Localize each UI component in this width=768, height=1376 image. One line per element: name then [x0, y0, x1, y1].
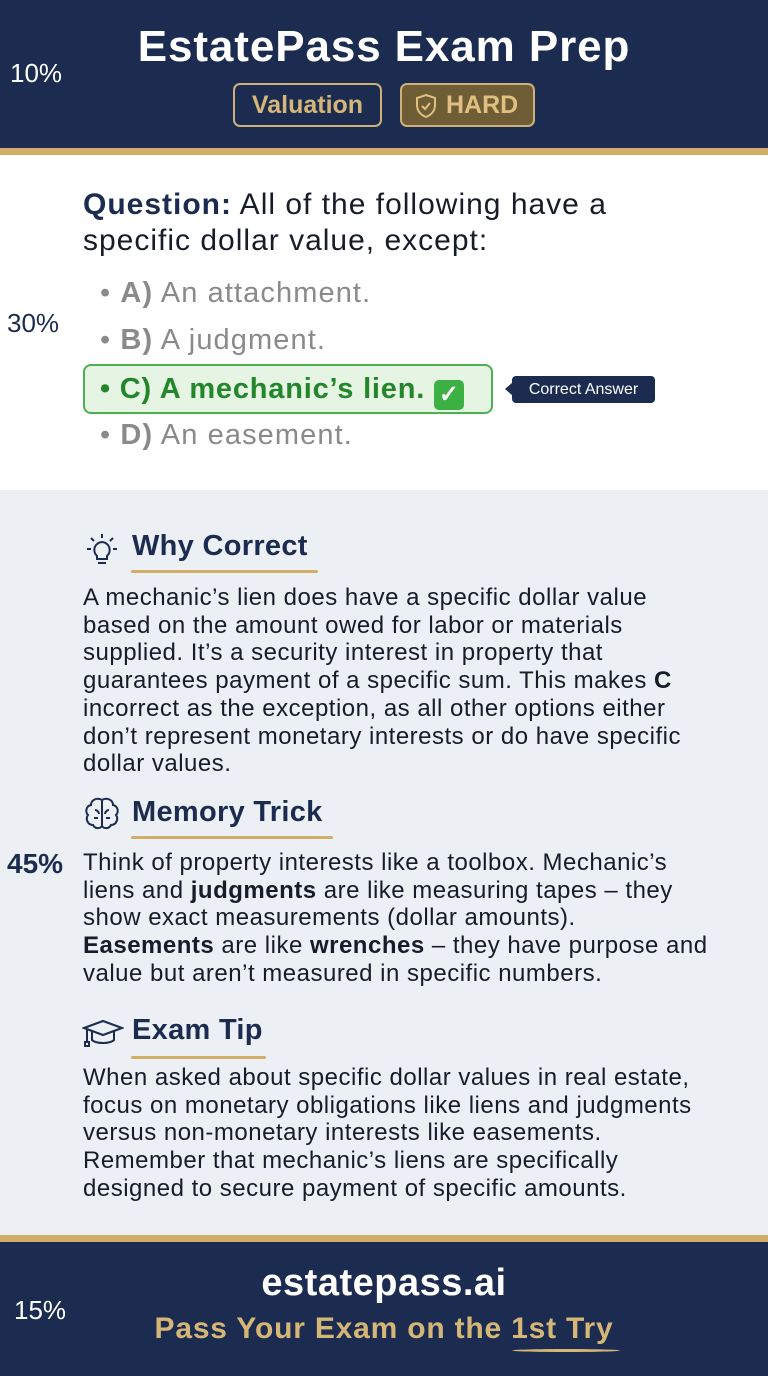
callout: Correct Answer: Correct Answer — [529, 381, 638, 398]
title: EstatePass Exam Prep — [138, 22, 630, 71]
callout: Correct Answer — [512, 376, 655, 403]
text block: versus non-monetary interests like easements. — [83, 1119, 602, 1146]
header — [0, 0, 768, 148]
text block: focus on monetary obligations like liens and judgments — [83, 1092, 692, 1119]
label: 30%: 30% — [7, 308, 59, 338]
badge: HARD — [400, 83, 535, 127]
text block: When asked about specific dollar values in real estate, — [83, 1064, 690, 1091]
text block — [83, 1064, 692, 1202]
text block: designed to secure payment of specific amounts. — [83, 1175, 627, 1202]
option C correct — [83, 364, 493, 414]
text block: dollar values. — [83, 750, 231, 777]
badge: HARD: HARD — [446, 91, 518, 119]
tagline: Pass Your Exam on the 1st Try — [155, 1312, 613, 1345]
icon: shield — [416, 94, 436, 118]
section: exam tip — [82, 1014, 692, 1202]
text block: don’t represent monetary interests or do have specific — [83, 723, 681, 750]
badge: Valuation: Valuation — [252, 91, 363, 119]
text block: supplied. It’s a security interest in property that — [83, 639, 603, 666]
option C correct: • C) A mechanic’s lien. — [100, 373, 425, 405]
text block: guarantees payment of a specific sum. This makes C — [83, 667, 672, 694]
label: 45%: 45% — [7, 848, 63, 879]
footer url: estatepass.ai — [261, 1262, 507, 1304]
text block — [83, 849, 708, 987]
text block: Easements are like wrenches – they have purpose and — [83, 932, 708, 959]
icon: lightbulb — [87, 534, 117, 564]
label: 10%: 10% — [10, 58, 62, 88]
badge: Valuation — [233, 83, 382, 127]
question text — [83, 188, 607, 257]
option D: • D) An easement. — [100, 419, 353, 451]
text block: value but aren’t measured in specific numbers. — [83, 960, 602, 987]
heading: Exam Tip — [132, 1014, 263, 1046]
text block: incorrect as the exception, as all other options either — [83, 695, 665, 722]
text block: Think of property interests like a toolbox. Mechanic’s — [83, 849, 667, 876]
icon: graduation cap — [82, 1020, 124, 1047]
footer — [0, 1242, 768, 1376]
option A: • A) An attachment. — [100, 277, 371, 309]
heading: Memory Trick — [132, 796, 323, 828]
question panel — [0, 155, 768, 490]
text block: A mechanic’s lien does have a specific dollar value — [83, 584, 647, 611]
label: 15%: 15% — [14, 1295, 66, 1325]
text block — [83, 584, 681, 777]
heading: Why Correct — [132, 530, 308, 562]
text block: Remember that mechanic’s liens are specifically — [83, 1147, 618, 1174]
option B: • B) A judgment. — [100, 324, 326, 356]
icon: brain — [85, 798, 119, 830]
question text: Question: All of the following have a — [83, 188, 607, 221]
question text: specific dollar value, except: — [83, 224, 488, 257]
text block: based on the amount owed for labor or materials — [83, 612, 623, 639]
text block: liens and judgments are like measuring tapes – they — [83, 877, 673, 904]
section: why correct — [83, 530, 681, 777]
section: memory trick — [7, 796, 708, 987]
option C correct: ✓ — [439, 381, 459, 408]
text block: show exact measurements (dollar amounts). — [83, 904, 576, 931]
